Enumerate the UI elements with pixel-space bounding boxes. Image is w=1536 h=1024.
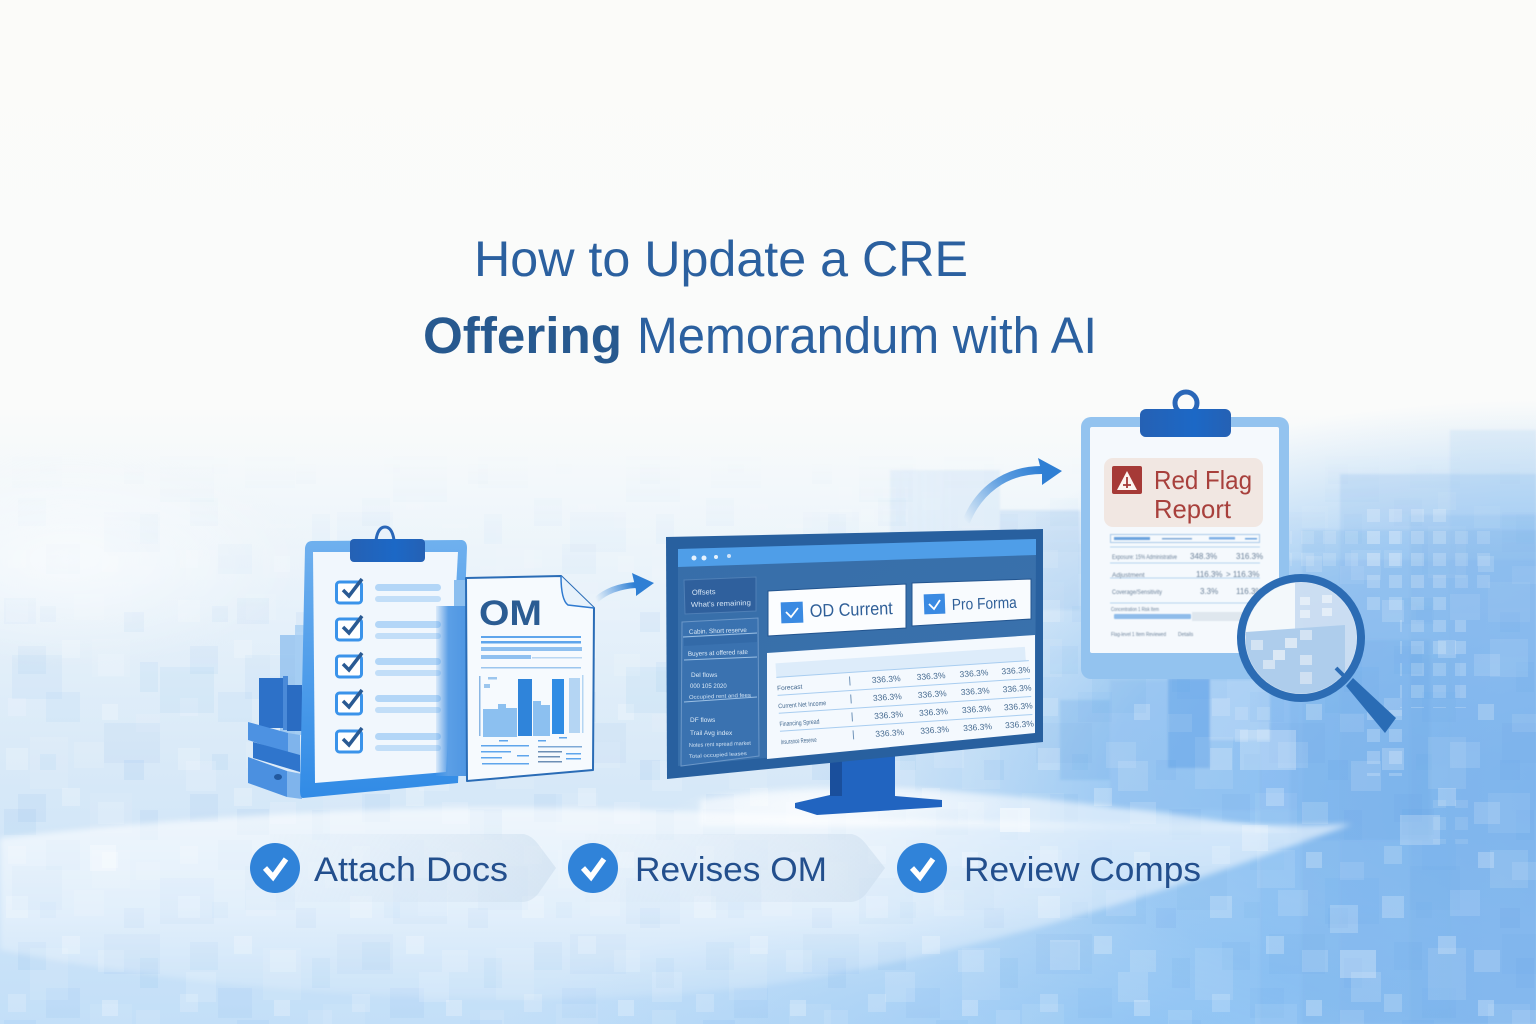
magnifier lens <box>1245 582 1357 694</box>
report clip <box>1140 392 1231 437</box>
red flag badge: Red Flag <box>1154 465 1252 495</box>
data table: 336.3% <box>962 703 991 715</box>
icon: check badge <box>568 843 618 893</box>
data table: 336.3% <box>1001 664 1031 676</box>
infographic canvas <box>0 240 1536 1024</box>
icon: warning triangle <box>1112 466 1142 494</box>
sidebar panel: menu: 000 105 2020 <box>690 684 727 690</box>
data table: 336.3% <box>873 691 902 703</box>
icon: document stack behind clipboard <box>248 625 305 799</box>
data table: Forecast <box>777 684 803 692</box>
data table: 336.3% <box>1004 700 1033 712</box>
data table: Financing Spread <box>779 719 820 728</box>
title line 1: How to Update a CRE <box>474 231 968 287</box>
report table: > 116.3% <box>1226 570 1259 579</box>
clipboard board <box>300 540 467 798</box>
sidebar panel: menu: Total occupied leases <box>689 751 748 760</box>
red flag report clipboard <box>1081 392 1289 679</box>
bar chart <box>479 675 584 737</box>
data table: 336.3% <box>919 706 949 718</box>
report table: 316.3% <box>1236 552 1263 561</box>
arrow: monitor to report <box>966 458 1062 522</box>
tab: Pro Forma <box>912 579 1031 626</box>
checklist row 4 <box>336 690 441 714</box>
arrow: documents to monitor <box>596 573 654 600</box>
sidebar panel: menu: DF flows <box>690 717 716 724</box>
data table: 336.3% <box>960 685 990 697</box>
monitor bezel <box>666 529 1043 779</box>
data table: 336.3% <box>874 709 904 721</box>
step: Review Comps: Review Comps <box>964 851 1201 889</box>
report table: 348.3% <box>1190 552 1217 561</box>
checklist row 2 <box>336 616 441 640</box>
report table: 116.3% <box>1236 587 1263 596</box>
data table: Insurance Reserve <box>780 737 817 746</box>
sidebar panel: menu: Del flows <box>691 672 718 679</box>
data table: 336.3% <box>920 724 950 736</box>
sidebar panel: heading: Offsets <box>692 587 716 597</box>
checklist row 1 <box>336 579 441 603</box>
data table: 336.3% <box>963 721 993 733</box>
sidebar panel: menu <box>681 618 759 766</box>
icon: check badge <box>897 843 947 893</box>
data table: 336.3% <box>871 673 901 685</box>
sidebar panel: heading <box>684 577 756 614</box>
report table <box>1110 534 1270 638</box>
OM document <box>466 576 594 781</box>
report table: Concentration 1 Risk Item <box>1111 607 1159 613</box>
data table: 336.3% <box>1005 718 1035 730</box>
icon: checklist clipboard <box>300 527 468 798</box>
sidebar panel: menu: Buyers at offered rate <box>688 649 748 658</box>
title <box>423 231 1097 364</box>
document text lines <box>481 636 582 668</box>
sidebar panel: menu: Notes rent spread market <box>689 741 751 749</box>
window title bar <box>678 539 1036 567</box>
data table: Current Net Income <box>778 700 827 710</box>
checklist row 5 <box>336 728 441 752</box>
folder flap <box>436 580 468 776</box>
report table: Flag-level 1 Item Reviewed <box>1111 632 1166 638</box>
step: Attach Docs <box>250 834 556 902</box>
data table: 336.3% <box>959 667 989 679</box>
clipboard clip <box>350 527 425 562</box>
step: Review Comps <box>897 843 1201 893</box>
document page <box>466 576 594 781</box>
data table <box>767 635 1035 759</box>
report table: 3.3% <box>1200 587 1218 596</box>
monitor screen <box>678 539 1036 766</box>
data table: 336.3% <box>1002 682 1032 694</box>
data table: 336.3% <box>916 670 946 682</box>
red flag badge: Report <box>1154 494 1232 524</box>
process steps <box>250 834 1201 902</box>
report board <box>1081 417 1289 679</box>
icon: check badge <box>250 843 300 893</box>
title line 2 bold: Offering <box>423 307 622 364</box>
tab: OD Current <box>768 584 906 636</box>
monitor <box>666 529 1043 815</box>
building windows <box>820 480 1498 844</box>
footnote lines <box>481 737 582 764</box>
step: Revises OM: Revises OM <box>635 851 827 889</box>
clipboard paper <box>313 552 458 783</box>
report table: 116.3% <box>1196 570 1223 579</box>
background: pale sky with blue pixel skyline <box>0 409 1536 1024</box>
report table: Coverage/Sensitivity <box>1112 589 1163 596</box>
tab: OD Current: OD Current <box>809 598 893 621</box>
title line 2 regular: Memorandum with AI <box>637 307 1097 364</box>
tab: Pro Forma: Pro Forma <box>952 595 1017 614</box>
monitor stand <box>795 750 942 815</box>
magnifying glass <box>1241 578 1396 733</box>
magnifier handle <box>1336 668 1396 733</box>
data table: 336.3% <box>918 688 947 700</box>
magnifier rim <box>1241 578 1361 698</box>
sidebar panel: menu: Trail Avg index <box>690 730 733 737</box>
step: Revises OM <box>568 834 885 902</box>
sidebar panel: menu: Occupied rent and fees <box>689 693 751 701</box>
data table: 336.3% <box>875 727 905 739</box>
page fold <box>561 576 594 608</box>
sidebar panel: heading: What's remaining <box>691 600 751 609</box>
checklist row 3 <box>336 653 441 677</box>
report paper <box>1090 427 1279 653</box>
red flag badge <box>1104 458 1263 527</box>
OM label: OM <box>479 594 542 633</box>
report table: Adjustment <box>1112 572 1145 579</box>
step: Attach Docs: Attach Docs <box>314 851 508 889</box>
report table: Exposure: 15% Administrative <box>1112 554 1177 561</box>
report table: Details <box>1178 632 1194 638</box>
sidebar panel: menu: Cabin. Short reserve <box>689 627 747 636</box>
